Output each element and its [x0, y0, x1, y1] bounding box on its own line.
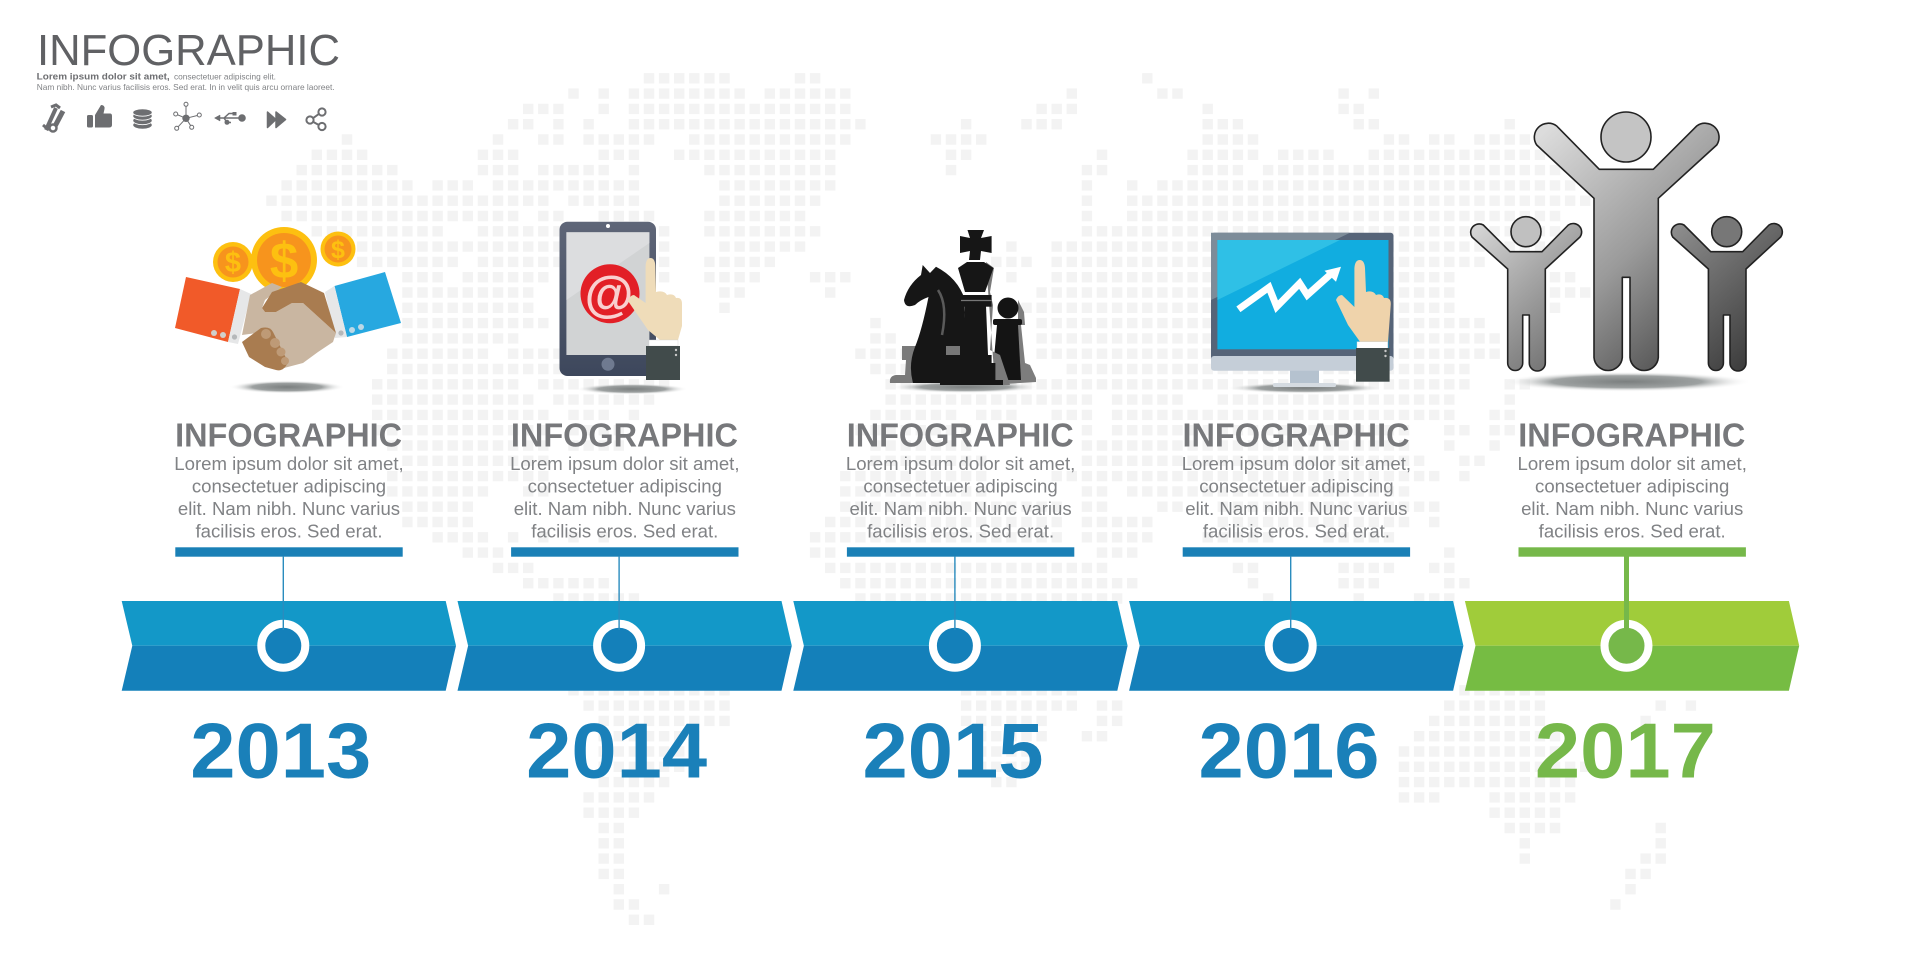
body text: [1182, 453, 1411, 541]
body text: elit. Nam nibh. Nunc varius: [178, 498, 400, 519]
connector bar and line: [847, 547, 1074, 632]
body text: consectetuer adipiscing: [528, 476, 722, 496]
panel: 2017: [1465, 112, 1799, 794]
icon: share: [306, 108, 326, 130]
connector bar and line: [511, 547, 738, 632]
body text: facilisis eros. Sed erat.: [531, 520, 718, 541]
icon: fast forward: [268, 112, 286, 128]
body text: Lorem ipsum dolor sit amet,: [510, 453, 740, 474]
icon: usb: [214, 112, 245, 124]
timeline arrow segment: [1465, 601, 1799, 691]
year: 2015: [862, 706, 1044, 794]
timeline arrow segment: [122, 601, 456, 691]
body text: [510, 453, 740, 541]
panel: 2013: [122, 227, 456, 794]
timeline arrow segment: [458, 601, 792, 691]
body text: Lorem ipsum dolor sit amet,: [174, 453, 404, 474]
connector bar and line: [1518, 547, 1746, 632]
panel: 2015: [793, 230, 1128, 794]
header subtitle text: consectetuer adipiscing elit.: [174, 71, 276, 81]
panel: 2014: [458, 222, 792, 794]
panel: 2016: [1129, 233, 1463, 794]
heading: INFOGRAPHIC: [511, 417, 738, 454]
icon: handshake with coins: $: [270, 232, 298, 289]
year: 2013: [190, 706, 371, 794]
icon: handshake with coins: $: [331, 236, 345, 264]
body text: [1517, 453, 1747, 541]
timeline arrow segment: [1129, 601, 1463, 691]
timeline marker: [1604, 618, 1648, 668]
timeline marker: [597, 618, 641, 668]
main title: INFOGRAPHIC: [37, 26, 340, 75]
timeline marker: [1269, 618, 1313, 668]
icon: database: [133, 109, 152, 129]
timeline marker: [933, 618, 977, 668]
header subtitle text: [37, 71, 335, 92]
year: 2014: [526, 706, 707, 794]
body text: elit. Nam nibh. Nunc varius: [1521, 498, 1743, 519]
heading: INFOGRAPHIC: [1518, 417, 1745, 454]
body text: facilisis eros. Sed erat.: [195, 520, 383, 541]
icon: handshake with coins: $: [225, 247, 241, 279]
body text: [174, 453, 404, 541]
body text: Lorem ipsum dolor sit amet,: [1182, 453, 1411, 474]
body text: consectetuer adipiscing: [192, 476, 386, 496]
body text: elit. Nam nibh. Nunc varius: [850, 498, 1072, 519]
header block: [37, 26, 340, 132]
body text: Lorem ipsum dolor sit amet,: [846, 453, 1075, 474]
icon: tablet with hand: [560, 222, 688, 394]
body text: Lorem ipsum dolor sit amet,: [1517, 453, 1747, 474]
body text: consectetuer adipiscing: [1535, 476, 1729, 496]
header subtitle text: Nam nibh. Nunc varius facilisis eros. Sed erat. In in velit quis arcu ornare laoreet.: [37, 82, 335, 92]
heading: INFOGRAPHIC: [175, 417, 402, 454]
header subtitle text: Lorem ipsum dolor sit amet,: [37, 71, 170, 81]
body text: facilisis eros. Sed erat.: [867, 520, 1054, 541]
icon: three people with raised arms: [1471, 112, 1782, 392]
connector bar and line: [175, 547, 403, 632]
icon: network: [174, 102, 201, 130]
body text: [846, 453, 1075, 541]
icon: chess pieces: [890, 230, 1039, 393]
body text: elit. Nam nibh. Nunc varius: [1185, 498, 1407, 519]
icon: handshake with coins: [175, 227, 401, 394]
body text: consectetuer adipiscing: [863, 476, 1058, 496]
year: 2016: [1198, 706, 1380, 794]
icon: monitor with rising chart and hand: [1211, 233, 1394, 394]
heading: INFOGRAPHIC: [847, 417, 1074, 454]
body text: consectetuer adipiscing: [1199, 476, 1394, 496]
timeline arrow segment: [793, 601, 1128, 691]
body text: elit. Nam nibh. Nunc varius: [514, 498, 736, 519]
connector bar and line: [1183, 547, 1410, 632]
year: 2017: [1535, 706, 1716, 794]
icon: thumbs up: [87, 105, 112, 128]
heading: INFOGRAPHIC: [1182, 417, 1410, 454]
timeline marker: [261, 618, 305, 668]
body text: facilisis eros. Sed erat.: [1539, 520, 1726, 541]
body text: facilisis eros. Sed erat.: [1203, 520, 1390, 541]
icon: wrenches: [43, 105, 63, 132]
icon: tablet with hand: @: [585, 266, 633, 322]
background dotted world map: [266, 78, 1701, 920]
